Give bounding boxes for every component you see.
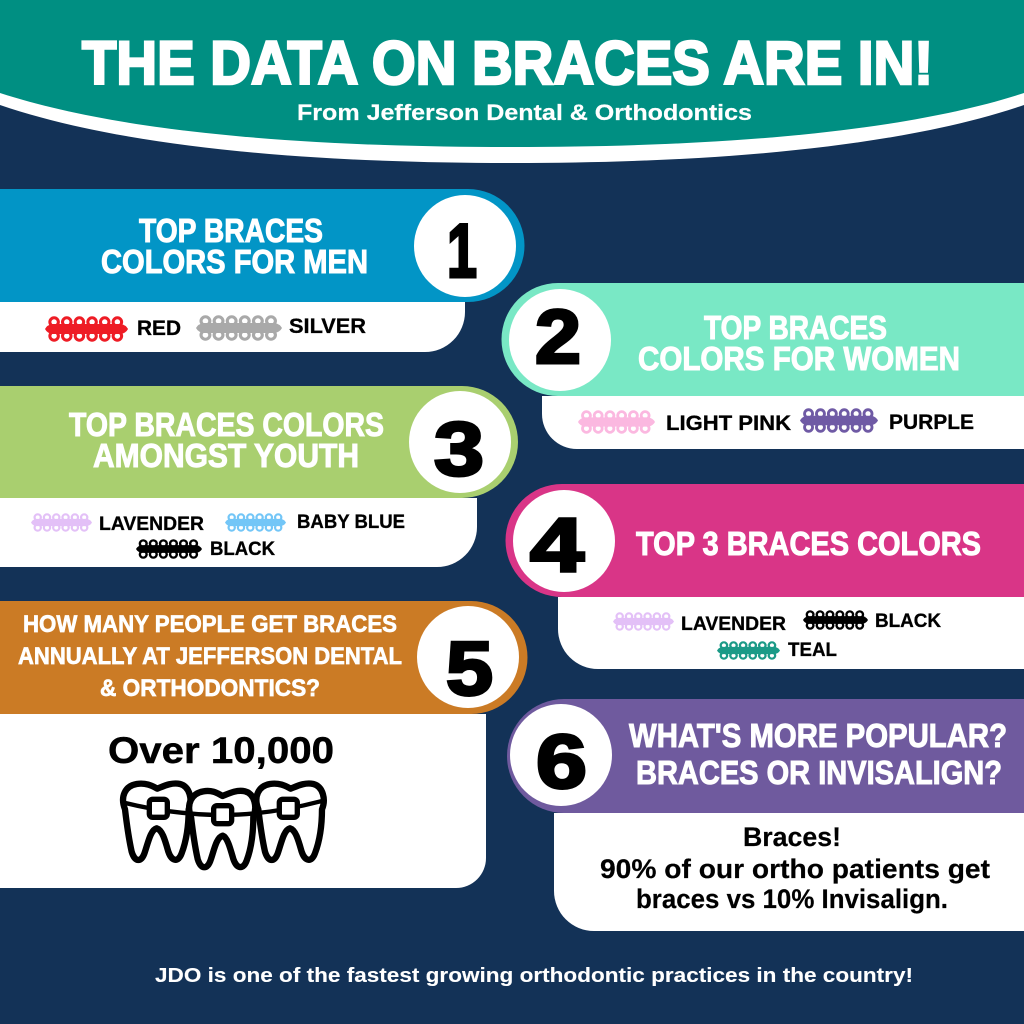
panel 1: top braces colors for men bbox=[0, 189, 524, 352]
heading 1: COLORS FOR MEN bbox=[101, 243, 368, 280]
heading 2: COLORS FOR WOMEN bbox=[638, 340, 960, 377]
legend: silver bbox=[196, 315, 366, 339]
panel 5: people getting braces annually bbox=[0, 601, 528, 888]
panel 6: braces or invisalign bbox=[507, 699, 1024, 931]
subtitle: From Jefferson Dental & Orthodontics bbox=[297, 100, 752, 125]
number 3: 3 bbox=[434, 407, 484, 492]
legend: black: BLACK bbox=[210, 539, 275, 560]
number 6: 6 bbox=[536, 720, 587, 805]
footer note: JDO is one of the fastest growing orthodontic practices in the country! bbox=[155, 964, 913, 987]
legend: red bbox=[45, 317, 181, 340]
heading 5: & ORTHODONTICS? bbox=[100, 675, 320, 702]
icon: teeth with braces bbox=[123, 783, 324, 867]
header banner bbox=[0, 0, 1024, 163]
answer text: 90% of our ortho patients get bbox=[600, 854, 990, 884]
heading 2: TOP BRACES bbox=[704, 309, 887, 346]
legend: silver: SILVER bbox=[289, 315, 366, 338]
number 1: 1 bbox=[447, 209, 477, 294]
legend: lavender: LAVENDER bbox=[681, 614, 786, 635]
heading 5: HOW MANY PEOPLE GET BRACES bbox=[23, 611, 397, 638]
legend: lavender: LAVENDER bbox=[99, 514, 204, 535]
legend: black bbox=[803, 611, 941, 632]
legend: teal bbox=[717, 640, 837, 661]
legend: baby blue bbox=[225, 512, 405, 533]
heading 1: TOP BRACES bbox=[139, 212, 323, 249]
answer text: Braces! bbox=[743, 822, 841, 852]
legend: red: RED bbox=[137, 317, 181, 340]
panel 2: top braces colors for women bbox=[502, 283, 1024, 449]
heading 3: TOP BRACES COLORS bbox=[69, 406, 384, 443]
heading 3: AMONGST YOUTH bbox=[93, 437, 359, 474]
heading 4: TOP 3 BRACES COLORS bbox=[636, 525, 981, 562]
legend: lavender bbox=[31, 514, 204, 535]
number 5: 5 bbox=[446, 627, 493, 712]
legend: black bbox=[136, 539, 275, 560]
legend: purple bbox=[800, 410, 974, 434]
title: THE DATA ON BRACES ARE IN! bbox=[82, 29, 933, 97]
number 4: 4 bbox=[530, 503, 584, 588]
stat: over 10,000: Over 10,000 bbox=[108, 730, 334, 771]
number 2: 2 bbox=[535, 295, 581, 380]
legend: baby blue: BABY BLUE bbox=[297, 512, 405, 533]
panel 4: top 3 braces colors bbox=[505, 484, 1024, 669]
legend: lavender bbox=[613, 613, 786, 635]
legend: purple: PURPLE bbox=[889, 411, 974, 434]
legend: light pink bbox=[578, 412, 791, 435]
legend: black: BLACK bbox=[875, 611, 941, 632]
legend: teal: TEAL bbox=[788, 640, 837, 661]
legend: light pink: LIGHT PINK bbox=[666, 412, 791, 435]
panel 3: top braces colors amongst youth bbox=[0, 386, 518, 567]
answer text: braces vs 10% Invisalign. bbox=[636, 884, 948, 914]
heading 5: ANNUALLY AT JEFFERSON DENTAL bbox=[18, 643, 402, 670]
